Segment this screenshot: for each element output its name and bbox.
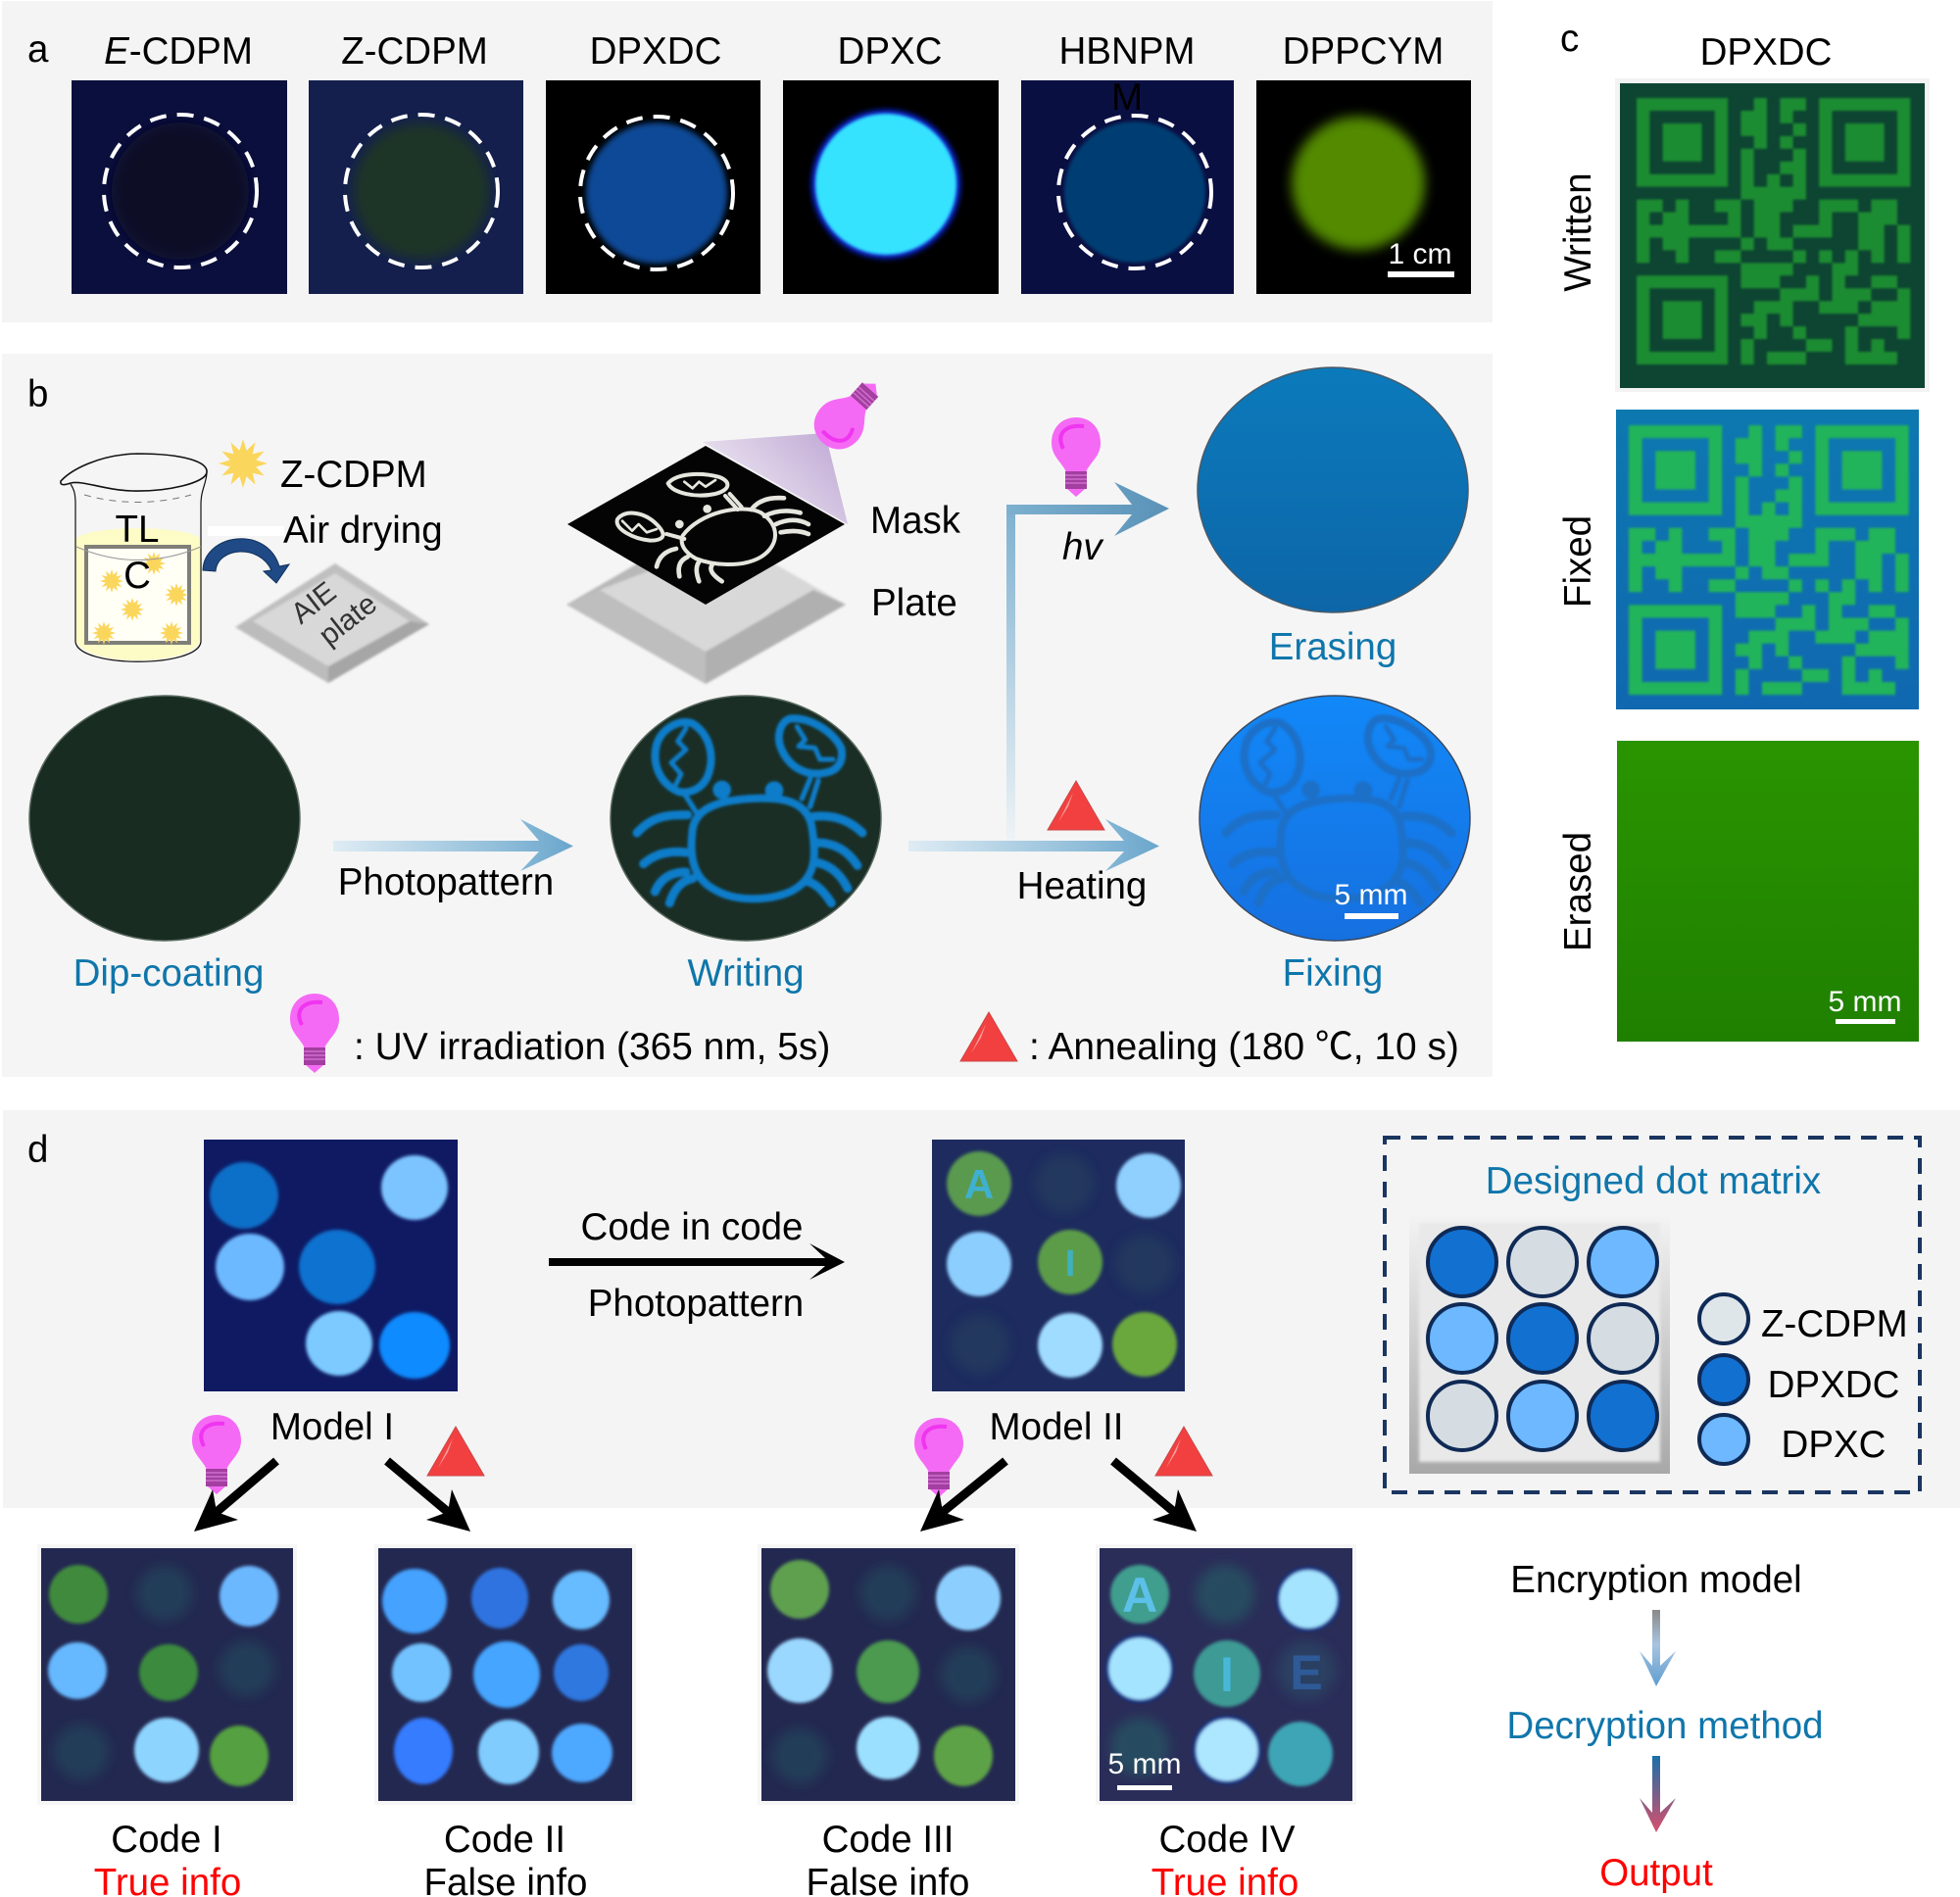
photo: Code II [374, 1544, 636, 1805]
arrow: code in code [549, 1243, 845, 1280]
panel label d: d [27, 1129, 48, 1171]
curved arrow to AIE plate [203, 539, 289, 583]
heading: DPXC: DPXC [838, 30, 942, 73]
heading: HBNPM: HBNPM [1058, 30, 1196, 73]
label: Code II: Code II [444, 1819, 565, 1861]
label: Fixed: Fixed [1557, 515, 1599, 608]
panel label b: b [27, 373, 48, 415]
photo: Code IV: 5 mm [1107, 1748, 1182, 1780]
arrow: Model II to Code III [920, 1461, 1005, 1532]
photo: Model II [932, 1140, 1185, 1391]
photo: erased: 5 mm [1829, 986, 1901, 1018]
label: Written: Written [1557, 172, 1599, 292]
label: Dip-coating: Dip-coating [74, 952, 264, 995]
icon: heat triangle for Model II [1155, 1427, 1212, 1476]
photo: Code IV [1096, 1544, 1356, 1805]
legend: UV irradiation: : UV irradiation (365 nm, 5s) [354, 1026, 830, 1068]
beaker with TLC plate [61, 454, 207, 661]
photo: DPPCYM: 1 cm [1388, 238, 1452, 270]
heading: DPPCYM: DPPCYM [1283, 30, 1444, 73]
label: Code in code: Code in code [581, 1206, 803, 1248]
photo: DPPCYM [1256, 80, 1471, 294]
panel label c: c [1560, 18, 1579, 60]
label: Erasing: Erasing [1269, 626, 1396, 668]
icon: heat triangle for Model I [427, 1427, 484, 1476]
photo: E-CDPM [72, 80, 287, 294]
heading: E-CDPM: E-CDPM [104, 30, 253, 73]
heading: Z-CDPM: Z-CDPM [341, 30, 488, 73]
flow key [1506, 1559, 1824, 1894]
label: Fixing: Fixing [1283, 952, 1383, 995]
legend: DPXDC [1699, 1355, 1899, 1406]
label: Code IV: Code IV [1158, 1819, 1296, 1861]
AIE plate: plate [313, 587, 383, 653]
photo: Code IV: E [1290, 1645, 1323, 1700]
label: Code I: Code I [111, 1819, 222, 1861]
label: Encryption model: Encryption model [1510, 1559, 1802, 1601]
legend: DPXC: DPXC [1782, 1424, 1886, 1466]
plate under mask [566, 524, 846, 684]
label: Code III: Code III [822, 1819, 954, 1861]
disc: fixing crab: 5 mm [1335, 879, 1407, 911]
arrow: photopattern [333, 819, 573, 871]
photo: Model II: I [1065, 1243, 1075, 1285]
arrow: model to method [1640, 1610, 1676, 1686]
panel c: QR code [1557, 18, 1930, 1042]
photo: Model II: A [964, 1161, 994, 1207]
label: Mask: Mask [870, 500, 961, 542]
disc: dip-coating [29, 696, 300, 941]
beaker with TLC plate: C [123, 555, 151, 597]
plate [1409, 1213, 1670, 1474]
legend: Z-CDPM [1699, 1294, 1908, 1345]
photo: HBNPM [1021, 76, 1234, 294]
legend: annealing [960, 1012, 1459, 1068]
dashed box: designed dot matrix [1385, 1138, 1920, 1492]
arrow: method to output [1640, 1756, 1676, 1832]
label: Air drying: Air drying [283, 510, 443, 552]
photo: DPXDC [546, 80, 760, 294]
arrow: Model I to Code I [194, 1461, 276, 1532]
panel a: material photos [2, 1, 1493, 322]
photo: Model I [204, 1140, 458, 1391]
legend: DPXDC: DPXDC [1768, 1364, 1899, 1406]
panel label a: a [27, 28, 49, 71]
icon: UV bulb [1052, 417, 1101, 497]
disc: erasing [1198, 367, 1468, 612]
heading: DPXDC: DPXDC [590, 30, 721, 73]
label: hv: hv [1062, 526, 1104, 568]
icon: Z-CDPM star [219, 439, 268, 488]
photo: Code III [758, 1544, 1019, 1805]
heading: Designed dot matrix: Designed dot matrix [1486, 1160, 1821, 1202]
icon: heating triangle [1048, 781, 1104, 830]
label: Erased: Erased [1557, 832, 1599, 951]
photo: Code I [37, 1544, 297, 1805]
photo: Code IV: A [1122, 1568, 1157, 1623]
legend: Z-CDPM: Z-CDPM [1761, 1303, 1908, 1345]
disc: fixing crab [1200, 696, 1470, 941]
label: Model II: Model II [990, 1406, 1123, 1448]
arrow: heating [908, 819, 1159, 871]
label: Heating: Heating [1017, 865, 1147, 907]
mask with crab [567, 446, 845, 605]
white patch behind air drying [208, 526, 284, 536]
legend: annealing: : Annealing (180 ℃, 10 s) [1029, 1026, 1459, 1068]
legend: UV irradiation [290, 994, 830, 1073]
label: Decryption method: Decryption method [1506, 1705, 1824, 1747]
AIE plate [235, 563, 429, 683]
label: Photopattern: Photopattern [338, 861, 554, 903]
icon: UV bulb over mask [805, 367, 894, 460]
photo: DPXC [783, 80, 999, 294]
QR: fixed [1616, 410, 1919, 709]
disc: writing crab [611, 696, 881, 941]
photo: Z-CDPM [309, 80, 523, 294]
heading: DPXDC: DPXDC [1700, 31, 1832, 73]
legend: DPXC [1699, 1415, 1886, 1466]
panel d: dot matrix encryption [3, 1110, 1960, 1508]
label: Writing: Writing [687, 952, 805, 995]
label: Photopattern: Photopattern [588, 1283, 804, 1325]
beaker with TLC plate: TL [116, 509, 159, 551]
photo: HBNPM: M [1111, 76, 1143, 119]
photo: Code IV: I [1220, 1647, 1234, 1702]
AIE plate: AIE [285, 576, 342, 630]
panel b: writing and fixing workflow [2, 354, 1493, 1077]
label: Model I: Model I [270, 1406, 394, 1448]
arrow: hv erasing [1006, 482, 1169, 840]
arrow: Model II to Code IV [1113, 1461, 1197, 1532]
arrow: Model I to Code II [387, 1461, 470, 1532]
label: Output: Output [1599, 1852, 1713, 1894]
dot grid [1428, 1228, 1657, 1450]
QR: written [1615, 78, 1930, 392]
UV light beam [703, 433, 848, 524]
photo: erased [1617, 741, 1919, 1042]
icon: UV bulb for Model I [192, 1415, 241, 1494]
icon: UV bulb for Model II [914, 1418, 963, 1497]
label: Plate: Plate [871, 582, 957, 624]
label: Z-CDPM: Z-CDPM [280, 454, 427, 496]
